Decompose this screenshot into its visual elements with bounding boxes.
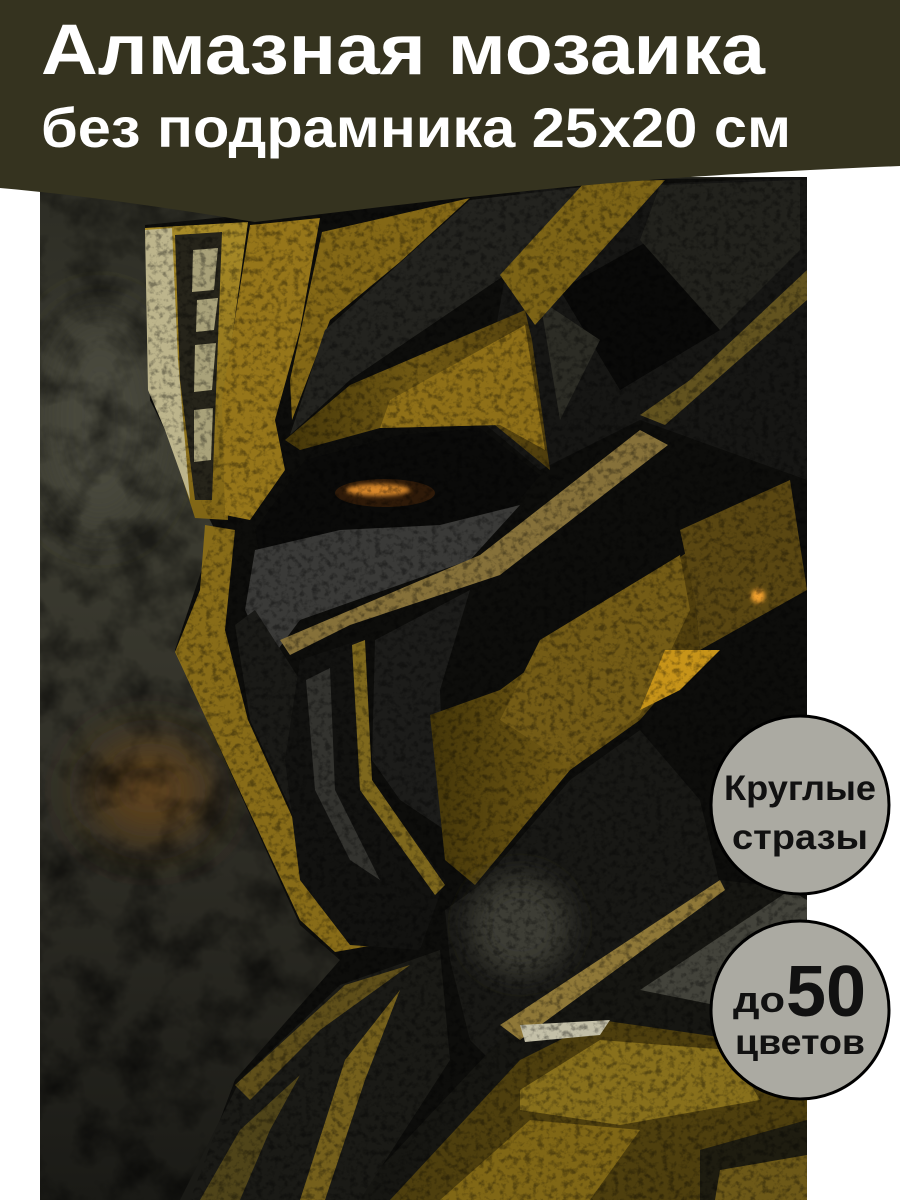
figure silhouette: [145, 177, 807, 1200]
mouth grille: [285, 590, 470, 950]
artwork: armored warrior portrait: [40, 177, 807, 1200]
dark nose inner: [235, 610, 298, 809]
neck highlight: [470, 875, 570, 975]
eye socket: [335, 479, 435, 507]
badge: round rhinestones: [711, 716, 889, 894]
badge: round rhinestones: Круглые: [724, 769, 876, 808]
painting background: [40, 177, 807, 1200]
badge: up to 50 colours: 50: [786, 952, 866, 1032]
shoulder armor: [350, 880, 807, 1200]
subtitle: без подрамника 25х20 см: [41, 96, 791, 159]
badge: up to 50 colours: до: [733, 979, 785, 1020]
badge: up to 50 colours: [711, 921, 889, 1099]
helmet forehead gold plates: [222, 180, 665, 520]
title: Алмазная мозаика: [41, 11, 766, 90]
surface wear texture over armor: [145, 177, 807, 1200]
neck dark scales: [445, 730, 720, 1060]
helmet crest band: [145, 222, 248, 520]
glowing eye: [346, 484, 410, 496]
badge: round rhinestones: стразы: [732, 818, 868, 857]
cheek gold plates: [430, 480, 807, 885]
upper right dark armor: [480, 177, 807, 480]
header banner: [0, 0, 900, 222]
dark textured cheek: [245, 505, 520, 660]
badge: up to 50 colours: цветов: [735, 1023, 865, 1062]
nose guard gold frame: [175, 525, 375, 952]
left chest armor: [180, 950, 450, 1200]
diagonal visor band: [280, 430, 668, 655]
